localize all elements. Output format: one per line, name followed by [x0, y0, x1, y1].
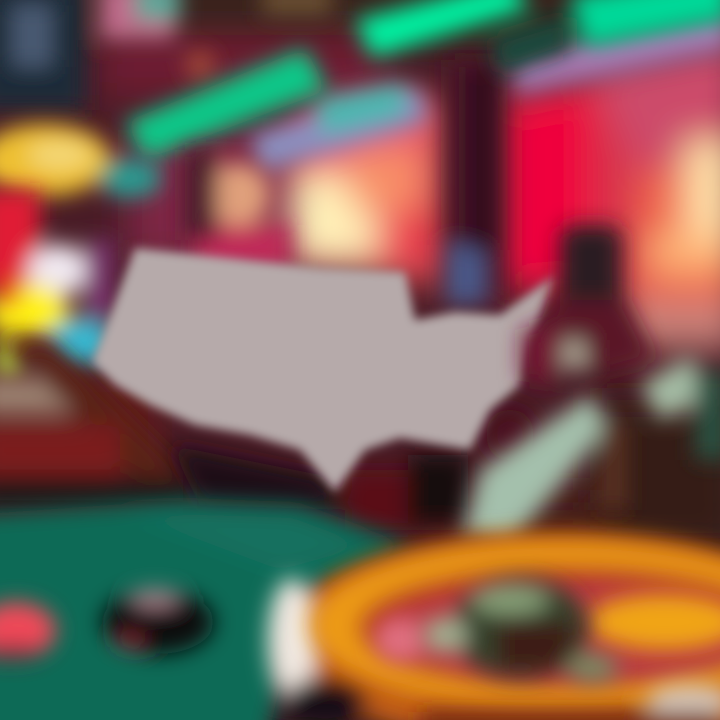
stripe: purple ceiling light — [250, 12, 720, 172]
icon: dark chips on the table — [102, 589, 214, 654]
figure: blurred person near the centre — [185, 150, 290, 270]
shadow: dark band beneath the map — [170, 409, 534, 530]
figure: dark silhouette on the right — [522, 225, 655, 385]
wheel centre — [423, 578, 618, 682]
panel: top-left dark window and pink light — [0, 0, 332, 110]
panel: red wall on the right — [500, 40, 720, 350]
wheel rim — [268, 532, 720, 720]
icon: yellow lamp — [0, 124, 162, 198]
decoration: dark stacks at lower right — [540, 387, 720, 542]
decoration: colourful chips on the left — [0, 190, 114, 382]
background: dark casino wall — [0, 18, 720, 474]
panel: pale orange lit wall — [290, 90, 445, 285]
icon: red poker chip — [0, 602, 56, 660]
wheel ring — [310, 541, 720, 709]
table: green felt — [0, 500, 410, 720]
decoration: brown diagonal rail and pale counter — [0, 335, 190, 508]
wheel lower edge — [420, 684, 720, 720]
map: grey United States silhouette — [92, 248, 555, 492]
roulette wheel — [268, 532, 720, 720]
icons: green ceiling lights — [125, 0, 720, 160]
wheel inner yellow band — [374, 594, 720, 662]
decoration: pale green diagonal and right highlights — [462, 355, 720, 545]
column: dark pillar — [446, 60, 502, 305]
